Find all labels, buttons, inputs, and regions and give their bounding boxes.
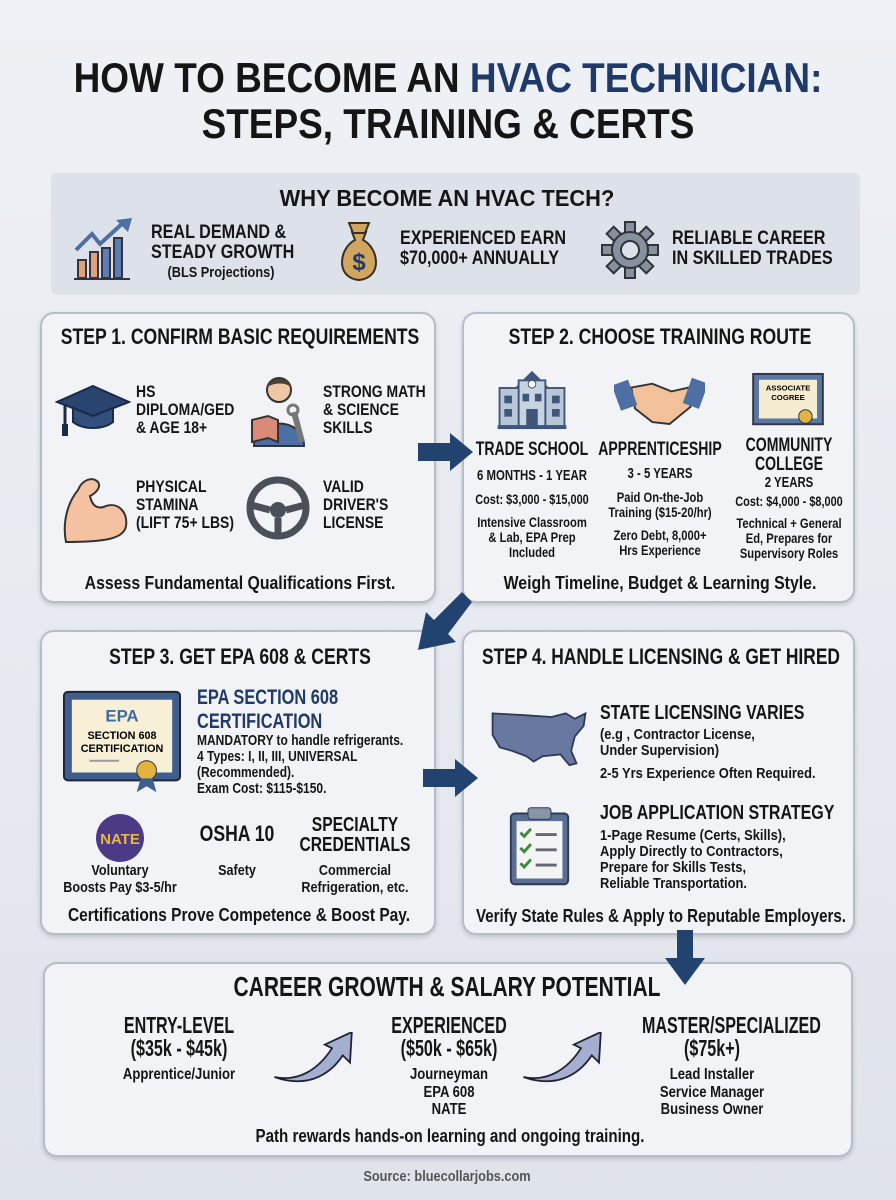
text: EPA details: MANDATORY to handle refrigerants. (197, 732, 403, 749)
text: job details: 1-Page Resume (Certs, Skills), (600, 827, 786, 844)
icon: money bag (341, 222, 377, 281)
text: demand (151, 222, 294, 263)
col: trade school: TRADE SCHOOL (476, 439, 588, 460)
arrow: growth 2 (523, 1032, 602, 1082)
col: community college: COLLEGE (755, 454, 823, 475)
text: EPA title: CERTIFICATION (197, 710, 322, 733)
text: specialty (300, 814, 410, 856)
text: EPA details (197, 732, 403, 797)
text: EPA details: Exam Cost: $115-$150. (197, 780, 326, 797)
col: community college: Technical + General (736, 515, 842, 531)
text: stamina (136, 477, 234, 532)
tier: master: MASTER/SPECIALIZED (642, 1012, 821, 1038)
panel: why become (51, 173, 860, 295)
col: trade school (475, 439, 589, 560)
arrow: step1 to step2 (418, 433, 473, 471)
icon: person studying (251, 377, 305, 447)
tier: master: Lead Installer (670, 1066, 754, 1083)
icon: money bag: $ (352, 249, 366, 276)
tier: experienced: EPA 608 (423, 1084, 475, 1100)
text: license: DRIVER'S (323, 495, 388, 514)
text: math: SKILLS (323, 418, 373, 437)
heading: step 4: STEP 4. HANDLE LICENSING & GET HIRED (482, 644, 840, 669)
tier: master: Business Owner (661, 1101, 763, 1118)
icon: degree certificate (752, 372, 824, 426)
tier: entry: Apprentice/Junior (123, 1066, 235, 1083)
text: math: STRONG MATH (323, 382, 426, 401)
panel: step 1 (40, 312, 436, 603)
panel: career growth (43, 962, 853, 1157)
heading: step 2: STEP 2. CHOOSE TRAINING ROUTE (509, 324, 811, 349)
text: job details: Apply Directly to Contractors, (600, 843, 783, 860)
text: stamina: (LIFT 75+ LBS) (136, 513, 234, 532)
icon: steering wheel (246, 476, 310, 540)
footer text: Path rewards hands-on learning and ongoing training. (256, 1126, 644, 1146)
text: earn: $70,000+ ANNUALLY (400, 248, 559, 269)
text: NATE (63, 862, 177, 896)
text: diploma: DIPLOMA/GED (136, 400, 234, 419)
text: job details: Reliable Transportation. (600, 875, 747, 892)
text: specialty: CREDENTIALS (300, 834, 410, 856)
panel: step 3 (40, 630, 436, 935)
tier: experienced: EXPERIENCED (391, 1012, 507, 1038)
text: math (323, 382, 426, 437)
text: experience: 2-5 Yrs Experience Often Required. (600, 765, 816, 782)
text: reliable (672, 228, 833, 269)
tier: experienced: ($50k - $65k) (401, 1035, 497, 1061)
text: earn: EXPERIENCED EARN (400, 228, 566, 249)
tier: entry: ($35k - $45k) (131, 1035, 227, 1061)
title: STEPS, TRAINING & CERTS (202, 100, 694, 147)
text: commercial (301, 862, 409, 896)
text: EPA details: (Recommended). (197, 764, 294, 781)
text: demand: REAL DEMAND & (151, 222, 286, 243)
tier: entry (123, 1012, 235, 1083)
text: licensing details (600, 726, 755, 759)
text: EPA details: 4 Types: I, II, III, UNIVERSAL (197, 748, 357, 765)
icon: EPA certificate: CERTIFICATION (81, 743, 163, 755)
text: safety: Safety (218, 862, 256, 879)
title (74, 54, 822, 147)
col: community college: COMMUNITY (746, 435, 832, 456)
arrow: step3 to step4 (423, 759, 478, 797)
tier: experienced: Journeyman (410, 1066, 488, 1083)
tier: experienced: NATE (432, 1101, 466, 1118)
icon: school building (498, 371, 566, 430)
text: licensing details: (e.g , Contractor License, (600, 726, 755, 743)
icon: NATE (96, 814, 144, 862)
text: OSHA: OSHA 10 (200, 821, 274, 846)
text: reliable: IN SKILLED TRADES (672, 248, 833, 269)
text: job strategy: JOB APPLICATION STRATEGY (600, 802, 834, 824)
icon: degree certificate: COGREE (771, 393, 805, 402)
icon: US map (492, 712, 586, 766)
icon: bicep (64, 478, 128, 543)
tier: entry: ENTRY-LEVEL (124, 1012, 234, 1038)
text: diploma (136, 382, 234, 437)
title: HOW TO BECOME AN HVAC TECHNICIAN: (74, 54, 822, 101)
footer text: Verify State Rules & Apply to Reputable Employers. (476, 906, 846, 926)
text: NATE: Voluntary (91, 862, 149, 879)
text: BLS: (BLS Projections) (168, 264, 274, 281)
text: earn (400, 228, 566, 269)
tier: master (642, 1012, 821, 1118)
icon: growth chart (74, 218, 132, 280)
col: trade school: Intensive Classroom (477, 514, 587, 530)
col: apprenticeship: Training ($15-20/hr) (608, 504, 712, 520)
text: specialty: SPECIALTY (312, 814, 398, 836)
col: trade school: Cost: $3,000 - $15,000 (475, 491, 589, 507)
tier: master: Service Manager (660, 1084, 764, 1100)
icon: degree certificate: ASSOCIATE (766, 383, 810, 392)
col: trade school: 6 MONTHS - 1 YEAR (477, 467, 587, 484)
icon: gear (601, 221, 659, 279)
heading: career: CAREER GROWTH & SALARY POTENTIAL (233, 971, 661, 1002)
text: job details (600, 827, 786, 892)
col: apprenticeship: 3 - 5 YEARS (627, 465, 693, 482)
col: community college (735, 435, 843, 561)
text: diploma: HS (136, 382, 155, 401)
text: demand: STEADY GROWTH (151, 242, 294, 263)
text: NATE: Boosts Pay $3-5/hr (63, 879, 177, 896)
heading: why: WHY BECOME AN HVAC TECH? (280, 185, 614, 211)
arrow: step4 to career (664, 930, 706, 986)
col: apprenticeship: APPRENTICESHIP (598, 439, 722, 460)
icon: NATE: NATE (100, 831, 140, 848)
col: apprenticeship: Zero Debt, 8,000+ (613, 527, 707, 543)
col: trade school: Included (509, 544, 555, 560)
footer text: Assess Fundamental Qualifications First. (85, 573, 395, 593)
tier: master: ($75k+) (684, 1035, 740, 1061)
col: apprenticeship (598, 439, 722, 558)
heading: step 1: STEP 1. CONFIRM BASIC REQUIREMENTS (61, 324, 419, 349)
text: EPA title: EPA SECTION 608 (197, 686, 338, 709)
text: EPA title (197, 686, 338, 733)
col: trade school: & Lab, EPA Prep (488, 529, 576, 545)
col: community college: Ed, Prepares for (746, 530, 832, 546)
col: apprenticeship: Paid On-the-Job (617, 489, 703, 505)
text: job details: Prepare for Skills Tests, (600, 859, 746, 876)
arrow: growth 1 (274, 1032, 353, 1082)
arrow: step2 to step3 (418, 592, 472, 650)
text: diploma: & AGE 18+ (136, 418, 207, 437)
text: stamina: PHYSICAL (136, 477, 206, 496)
col: apprenticeship: Hrs Experience (619, 542, 701, 558)
text: commercial: Refrigeration, etc. (301, 879, 409, 896)
icon: EPA certificate (63, 690, 181, 792)
icon: clipboard (510, 807, 570, 886)
text: license: LICENSE (323, 513, 383, 532)
text: commercial: Commercial (319, 862, 391, 879)
tier: experienced (391, 1012, 507, 1118)
text: math: & SCIENCE (323, 400, 399, 419)
icon: EPA certificate: SECTION 608 (87, 730, 157, 742)
icon: EPA certificate: EPA (105, 706, 139, 725)
text: license (323, 477, 388, 532)
text: licensing details: Under Supervision) (600, 742, 719, 759)
footer text: Certifications Prove Competence & Boost Pay. (68, 905, 410, 925)
text: stamina: STAMINA (136, 495, 198, 514)
footer text: Weigh Timeline, Budget & Learning Style. (504, 573, 816, 593)
col: community college: Supervisory Roles (740, 545, 838, 561)
text: licensing: STATE LICENSING VARIES (600, 702, 804, 724)
col: community college: 2 YEARS (765, 474, 813, 491)
icon: grad cap (55, 384, 131, 436)
panel: step 2 (462, 312, 855, 603)
source: Source: bluecollarjobs.com (363, 1168, 531, 1185)
icon: handshake (614, 378, 705, 425)
text: license: VALID (323, 477, 364, 496)
panel: step 4 (462, 630, 855, 935)
text: reliable: RELIABLE CAREER (672, 228, 825, 249)
col: community college: Cost: $4,000 - $8,000 (735, 493, 843, 509)
heading: step 3: STEP 3. GET EPA 608 & CERTS (109, 644, 371, 669)
